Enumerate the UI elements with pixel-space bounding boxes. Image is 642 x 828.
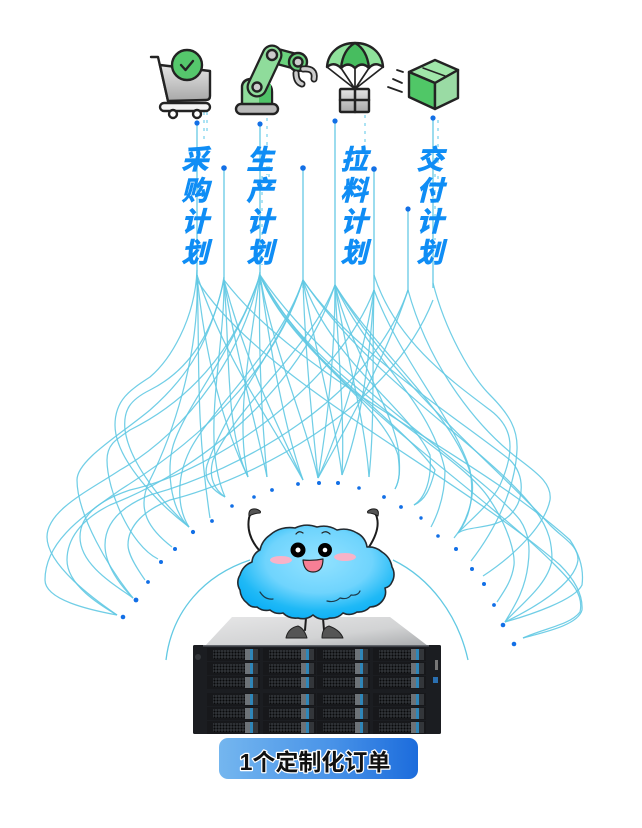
hands	[249, 509, 378, 516]
server	[193, 617, 441, 734]
badge text: 1个定制化订单	[240, 749, 390, 775]
label: 交付计划: 付	[416, 176, 448, 206]
order badge	[219, 738, 418, 779]
eyes	[290, 542, 332, 558]
cheeks	[270, 553, 356, 564]
eyebrows	[296, 532, 330, 534]
connection curves	[45, 118, 582, 638]
cloud body	[238, 525, 394, 619]
label: 交付计划: 划	[416, 238, 448, 268]
label: 拉料计划: 划	[340, 238, 372, 268]
label: 拉料计划	[340, 145, 372, 268]
label: 生产计划: 生	[246, 145, 276, 175]
label: 交付计划: 交	[416, 145, 448, 175]
label: 采购计划: 采	[182, 145, 212, 175]
icon: robot arm	[236, 50, 314, 114]
mouth	[303, 559, 323, 572]
ghost dashes near labels	[204, 112, 438, 265]
cloud mascot	[238, 509, 394, 638]
label: 拉料计划: 拉	[340, 145, 372, 175]
drive bays	[207, 648, 426, 734]
legs and feet	[305, 618, 324, 630]
label: 交付计划: 计	[416, 207, 446, 237]
top connection dots	[194, 115, 436, 212]
label: 采购计划: 购	[182, 176, 212, 206]
label: 拉料计划: 料	[340, 176, 370, 206]
label: 生产计划: 划	[246, 238, 278, 268]
icon: delivery box	[388, 60, 458, 109]
right arc	[393, 560, 468, 660]
left arc	[166, 560, 250, 660]
fold lines	[260, 591, 360, 602]
label: 采购计划: 划	[182, 238, 212, 268]
label: 采购计划: 计	[182, 207, 212, 237]
label: 交付计划	[416, 145, 448, 268]
arms	[248, 512, 378, 550]
icon: parachute with crate	[327, 43, 383, 112]
server front chassis	[193, 645, 441, 734]
label: 生产计划	[246, 145, 278, 268]
server top panel	[205, 617, 428, 646]
label: 生产计划: 产	[246, 176, 276, 206]
label: 采购计划	[182, 145, 212, 268]
bottom connection dots	[121, 481, 516, 646]
label: 生产计划: 计	[246, 207, 276, 237]
label: 拉料计划: 计	[340, 207, 370, 237]
icon: shopping cart	[151, 50, 210, 118]
